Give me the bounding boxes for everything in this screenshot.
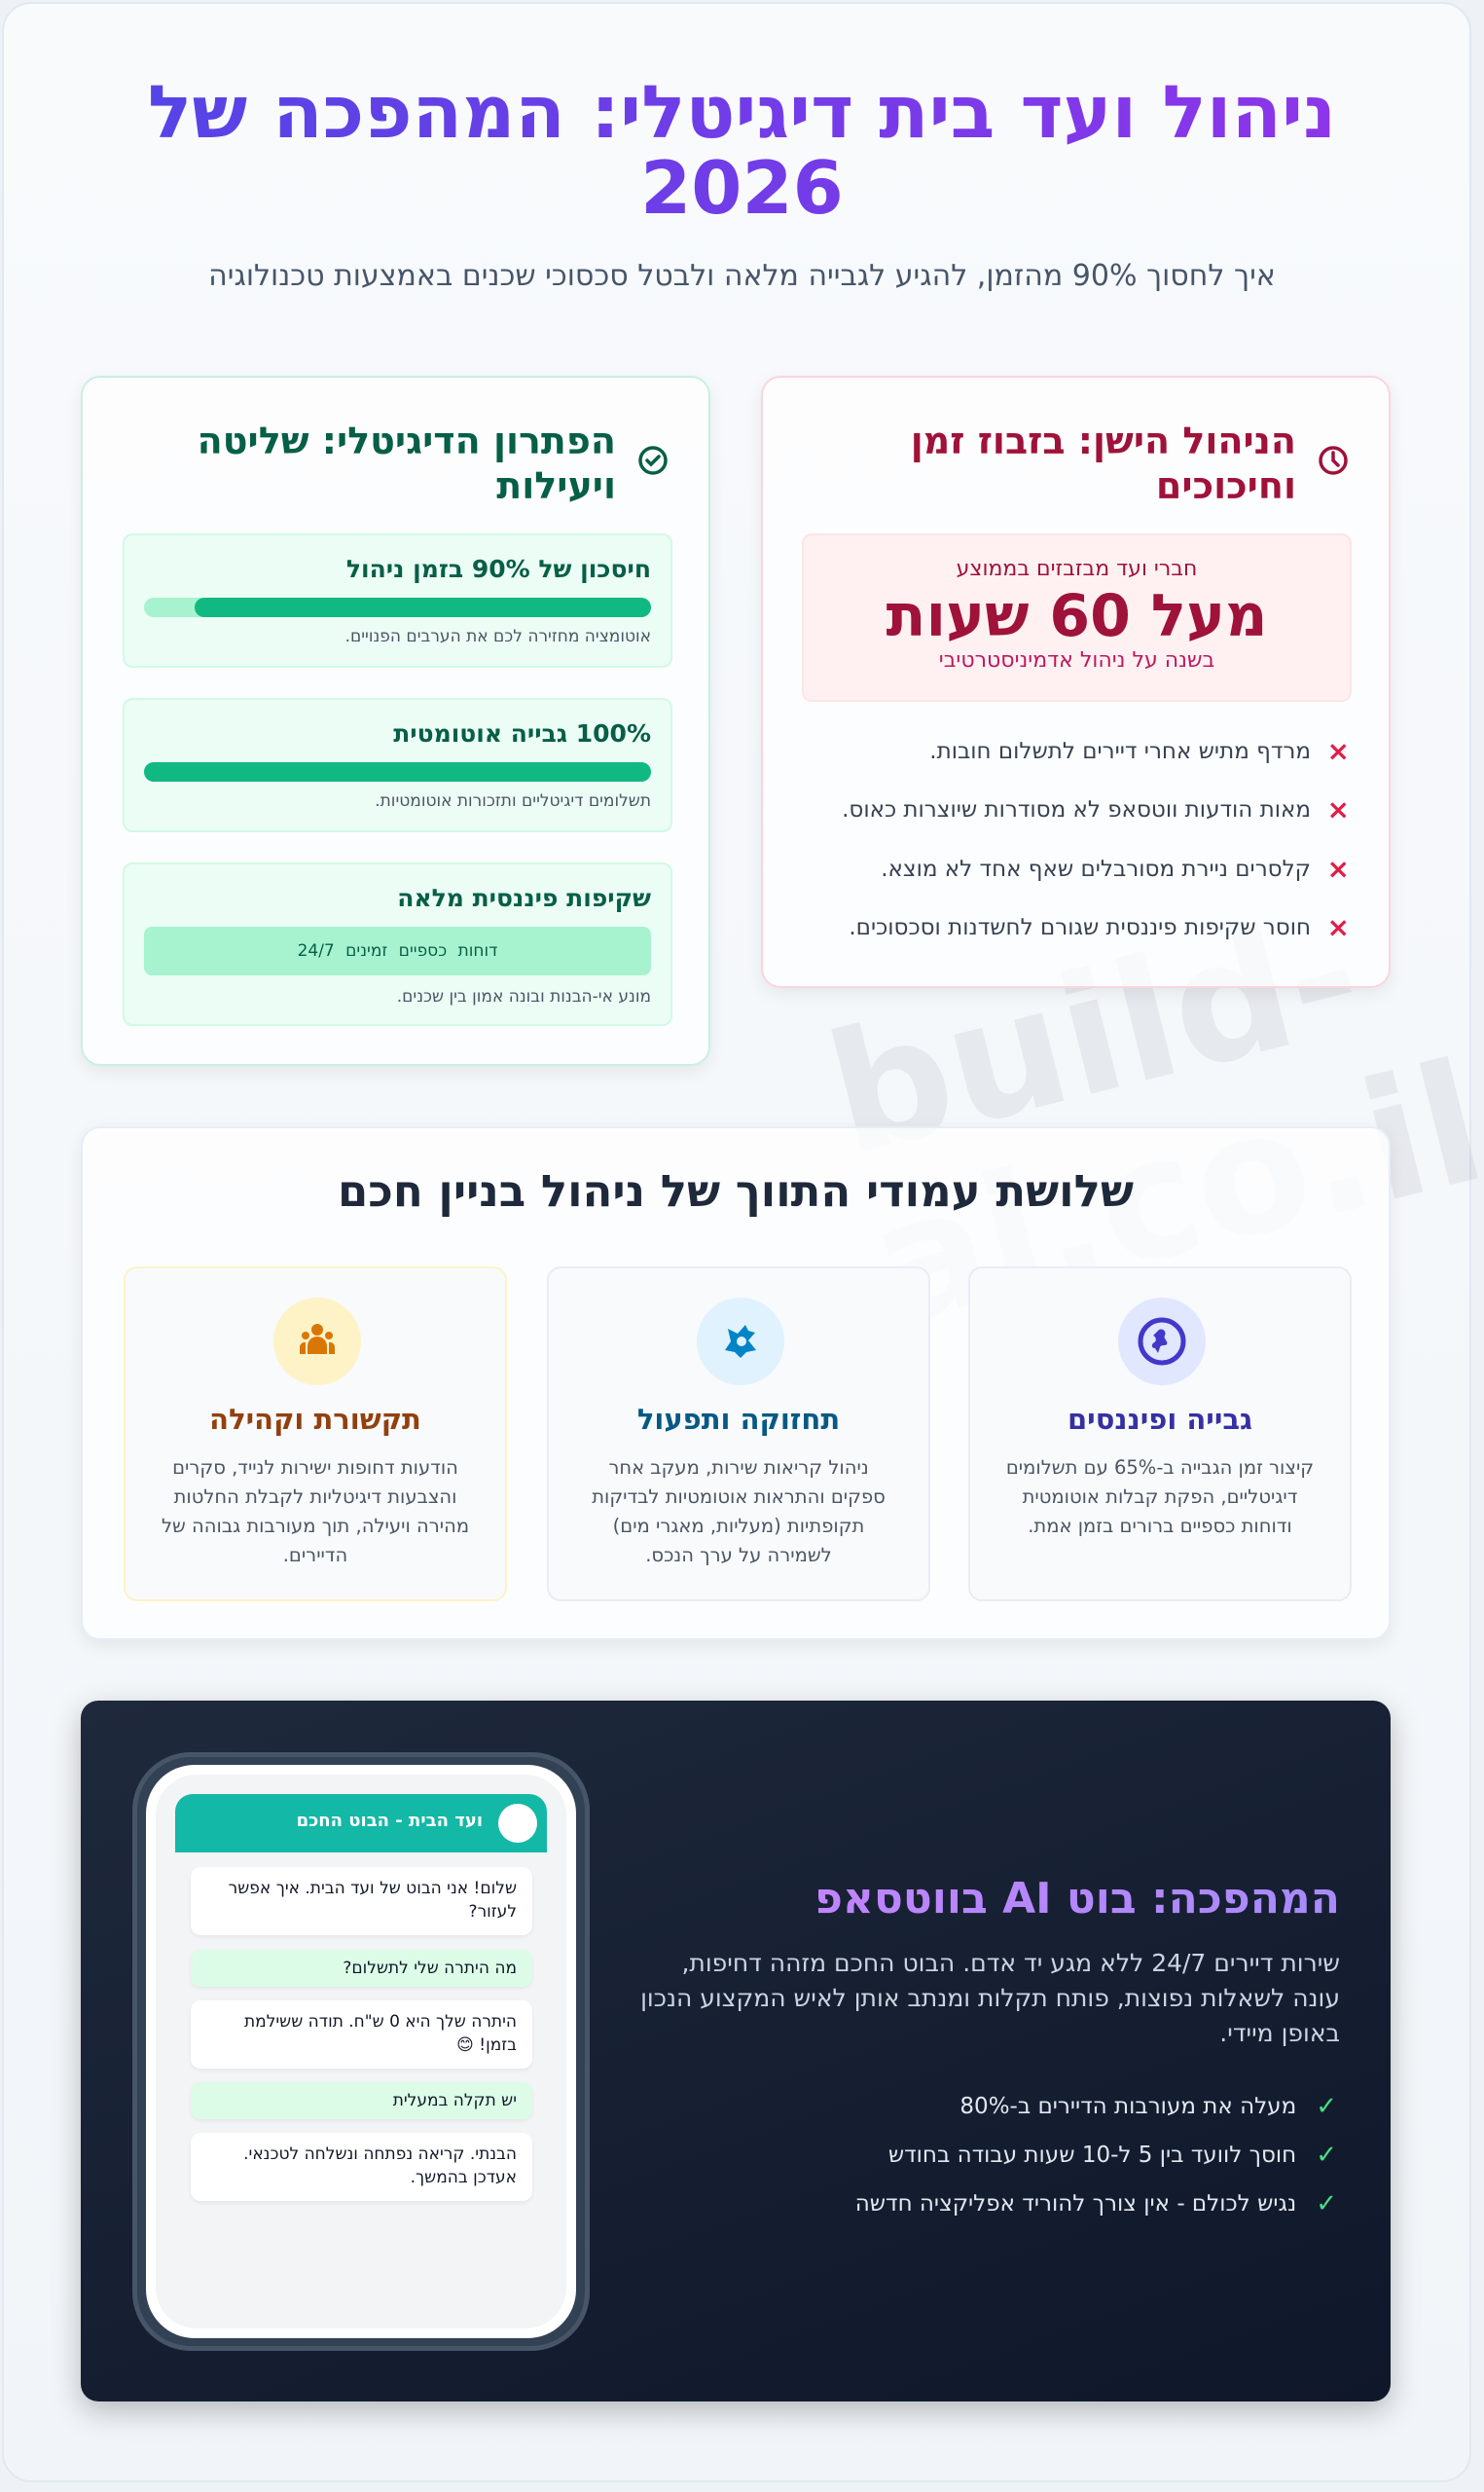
metric: time saving (123, 533, 672, 668)
chat header: ועד הבית - הבוט החכם (297, 1811, 483, 1831)
pillar: community: הודעות דחופות ישירות לנייד, סקרים והצבעות דיגיטליות לקבלת החלטות מהירה ויעילה, תוך מעורבות גבוהה של הדיירים. (162, 1456, 469, 1566)
metric: automatic collection: תשלומים דיגיטליים ותזכורות אוטומטיות. (375, 791, 651, 811)
panel: AI bot: נגיש לכולם - אין צורך להוריד אפליקציה חדשה (855, 2191, 1296, 2217)
panel: old management: × (1327, 793, 1350, 825)
pillar: finance: גבייה ופיננסים (1068, 1403, 1252, 1436)
metric: transparency: שקיפות פיננסית מלאה (397, 884, 651, 912)
heading: AI bot: המהפכה: בוט AI בווטסאפ (814, 1874, 1340, 1924)
panel: old management: × (1327, 911, 1350, 943)
watermark: build- (812, 876, 1379, 1193)
chat bubbles: שלום! אני הבוט של ועד הבית. איך אפשר לעזור? (229, 1879, 517, 1922)
panel: three pillars (81, 1126, 1391, 1640)
panel: AI bot: ✓ (1316, 2189, 1337, 2218)
pillar: maintenance: ניהול קריאות שירות, מעקב אחר ספקים והתראות אוטומטיות לבדיקות תקופתיות (מעליות, מאגרי מים) לשמירה על ערך הנכס. (592, 1456, 886, 1566)
phone mockup: יש תקלה במעלית (393, 2091, 517, 2110)
metric: automatic collection (123, 698, 672, 832)
icon: clock (1319, 446, 1348, 475)
icon: finance (1118, 1298, 1206, 1385)
description: שירות דיירים 24/7 ללא מגע יד אדם. הבוט החכם מזהה דחיפות, עונה לשאלות נפוצות, פותח תקלות ומנתב אותן לאיש המקצוע הנכון באופן מיידי. (640, 1949, 1340, 2047)
heading: digital solution: הפתרון הדיגיטלי: שליטה ויעילות (198, 420, 616, 507)
metric: transparency: דוחות כספיים זמינים 24/7 (298, 941, 497, 961)
title (0, 74, 1484, 226)
list: problems: × (1327, 735, 1350, 767)
panel: old management: מאות הודעות ווטסאפ לא מסודרות שיוצרות כאוס. (842, 796, 1311, 822)
watermark (812, 876, 1484, 1363)
phone mockup (132, 1752, 590, 2351)
stat box: חברי ועד מבזבזים בממוצע (957, 557, 1197, 581)
phone mockup: היתרה שלך היא 0 ש"ח. תודה ששילמת בזמן! 😊 (244, 2012, 517, 2055)
pillar: finance (968, 1266, 1352, 1601)
pillar: community (124, 1266, 507, 1601)
panel: old management: × (1327, 853, 1350, 885)
stat box: מעל 60 שעות (886, 582, 1267, 650)
panel: AI bot: חוסך לוועד בין 5 ל-10 שעות עבודה בחודש (888, 2143, 1296, 2168)
metric: automatic collection: 100% גבייה אוטומטית (393, 719, 651, 748)
pillar: maintenance (547, 1266, 930, 1601)
subtitle: איך לחסוך 90% מהזמן, להגיע לגבייה מלאה ולבטל סכסוכי שכנים באמצעות טכנולוגיה (208, 259, 1276, 293)
metric: time saving: חיסכון של 90% בזמן ניהול (346, 555, 651, 583)
panel: old management: קלסרים ניירת מסורבלים שאף אחד לא מוצא. (881, 857, 1311, 882)
metric: time saving: אוטומציה מחזירה לכם את הערבים הפנויים. (345, 627, 651, 646)
title: ניהול ועד בית דיגיטלי: המהפכה של (148, 69, 1336, 155)
chat bubbles (191, 1867, 532, 1935)
benefits list: ✓ (1316, 2092, 1337, 2121)
heading: old management: הניהול הישן: בזבוז זמן וחיכוכים (911, 420, 1296, 507)
chat header (175, 1794, 547, 1852)
panel: AI bot (81, 1701, 1391, 2401)
icon: maintenance (697, 1298, 784, 1385)
panel: old management: חוסר שקיפות פיננסית שגורם לחשדנות וסכסוכים. (849, 915, 1311, 940)
panel: AI bot: ✓ (1316, 2141, 1337, 2170)
panel: old management (761, 376, 1391, 988)
list: problems: מרדף מתיש אחרי דיירים לתשלום חובות. (929, 738, 1311, 763)
metric: transparency: מונע אי-הבנות ובונה אמון בין שכנים. (397, 987, 651, 1007)
stat box: בשנה על ניהול אדמיניסטרטיבי (939, 648, 1214, 673)
pillar: maintenance: תחזוקה ותפעול (637, 1403, 840, 1436)
pillar: community: תקשורת וקהילה (209, 1403, 421, 1436)
title: 2026 (640, 145, 844, 231)
benefits list: מעלה את מעורבות הדיירים ב-80% (959, 2094, 1296, 2119)
watermark: ai.co.il (853, 1026, 1484, 1363)
pillar: finance: קיצור זמן הגבייה ב-65% עם תשלומים דיגיטליים, הפקת קבלות אוטומטית ודוחות כספיים ברורים בזמן אמת. (1006, 1456, 1314, 1537)
heading: pillars: שלושת עמודי התווך של ניהול בניין חכם (338, 1165, 1134, 1217)
panel: digital solution (81, 376, 710, 1066)
phone mockup: הבנתי. קריאה נפתחה ונשלחה לטכנאי. אעדכן בהמשך. (243, 2144, 517, 2187)
stat box (802, 533, 1352, 702)
icon: check circle (638, 446, 668, 475)
icon: community (273, 1298, 361, 1385)
metric: transparency (123, 862, 672, 1026)
phone mockup: מה היתרה שלי לתשלום? (343, 1959, 517, 1978)
